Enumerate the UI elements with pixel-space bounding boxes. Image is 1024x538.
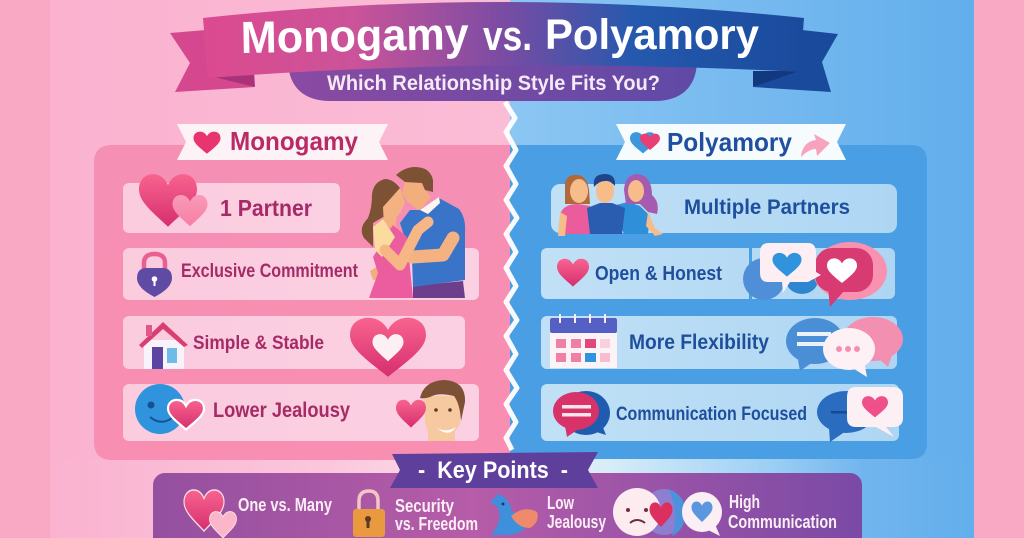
- panel: monogamy background: [94, 145, 512, 460]
- polyamory row: multiple partners: [551, 174, 897, 236]
- text: low jealousy: [547, 493, 606, 532]
- title banner: [170, 2, 838, 101]
- monogamy row: simple and stable: Simple & Stable: [193, 333, 324, 354]
- icon: smiley with heart: [135, 384, 204, 434]
- man's collar: [420, 197, 440, 214]
- polyamory row: open and honest: [541, 242, 895, 307]
- icon: heart message bubbles: [817, 387, 903, 442]
- title text: Monogamy: [240, 8, 469, 63]
- illustration: embracing couple: [362, 167, 465, 298]
- title text: [240, 8, 759, 63]
- zigzag centre divider: [505, 102, 517, 450]
- monogamy row: exclusive commitment: [123, 248, 479, 300]
- banner body: [203, 2, 804, 78]
- section label: monogamy: Monogamy: [230, 126, 358, 156]
- woman's face: [383, 188, 405, 228]
- key points ribbon: [390, 452, 598, 488]
- polyamory row: open and honest: Open & Honest: [595, 263, 722, 285]
- icon: arrow: [801, 134, 830, 157]
- polyamory row: more flexibility: More Flexibility: [629, 331, 769, 354]
- panel: polyamory background: [510, 145, 927, 459]
- icon: heart lock: [137, 254, 172, 297]
- icon: three people: [558, 174, 663, 236]
- section label: polyamory: [616, 124, 846, 160]
- title text: vs.: [483, 12, 532, 59]
- woman's dress: [369, 225, 413, 298]
- text: high communication: [728, 492, 837, 532]
- section label: polyamory: Polyamory: [667, 127, 793, 157]
- woman's sleeve: [373, 219, 395, 257]
- text: one vs. many: One vs. Many: [238, 495, 332, 515]
- man's arm: [412, 238, 453, 257]
- polyamory row: communication focused: [541, 384, 903, 442]
- icon: sad face with heart: [613, 488, 686, 536]
- icon: calendar: [550, 314, 617, 368]
- monogamy row: 1 partner: 1 Partner: [220, 195, 312, 221]
- text: security vs. freedom: Security: [395, 496, 454, 516]
- icon: two speech bubbles: [553, 391, 610, 437]
- panel: key points: [153, 473, 862, 538]
- text: security vs. freedom: [395, 496, 478, 534]
- text: high communication: Communication: [728, 512, 837, 532]
- banner left tail: [170, 30, 255, 92]
- man's face: [402, 182, 431, 210]
- polyamory row: more flexibility: [541, 314, 903, 377]
- section label: monogamy: [177, 124, 388, 160]
- icon: two hearts: [139, 174, 208, 227]
- woman's arm: [385, 222, 428, 265]
- icon: speech bubble with heart: [682, 492, 722, 536]
- icon: bird: [490, 494, 538, 535]
- banner right tail: [753, 30, 838, 92]
- man's hair: [396, 167, 433, 192]
- monogamy row: lower jealousy: Lower Jealousy: [213, 399, 350, 422]
- woman's hair: [362, 179, 400, 247]
- polyamory row: communication focused: Communication Focused: [616, 403, 807, 425]
- icon: big heart: [350, 318, 426, 377]
- monogamy row: simple and stable: [123, 316, 465, 377]
- icon: heart: [194, 132, 220, 154]
- icon: double heart: [630, 132, 660, 153]
- icon: chat bubbles: [786, 317, 903, 377]
- icon: two hearts: [184, 490, 236, 538]
- text: low jealousy: Low: [547, 493, 575, 513]
- icon: red heart: [557, 259, 589, 287]
- monogamy row: exclusive commitment: Exclusive Commitment: [181, 261, 359, 282]
- monogamy row: 1 partner: [123, 174, 340, 233]
- polyamory row: multiple partners: Multiple Partners: [684, 196, 850, 219]
- icon: speech bubbles: [743, 242, 887, 307]
- icon: padlock: [353, 491, 385, 537]
- icon: house: [139, 322, 188, 369]
- text: high communication: High: [729, 492, 760, 512]
- man's hand on her back: [370, 266, 384, 280]
- monogamy row: lower jealousy: [123, 380, 479, 441]
- title text: Polyamory: [545, 11, 759, 59]
- subtitle pill: Which Relationship Style Fits You?: [327, 72, 660, 95]
- text: security vs. freedom: vs. Freedom: [395, 514, 478, 534]
- icon: smiling face with heart: [396, 380, 465, 441]
- subtitle pill: [288, 60, 697, 101]
- key points ribbon: - Key Points -: [418, 457, 568, 484]
- text: low jealousy: Jealousy: [547, 512, 606, 532]
- man's shirt: [400, 198, 465, 287]
- man's trousers: [413, 281, 465, 298]
